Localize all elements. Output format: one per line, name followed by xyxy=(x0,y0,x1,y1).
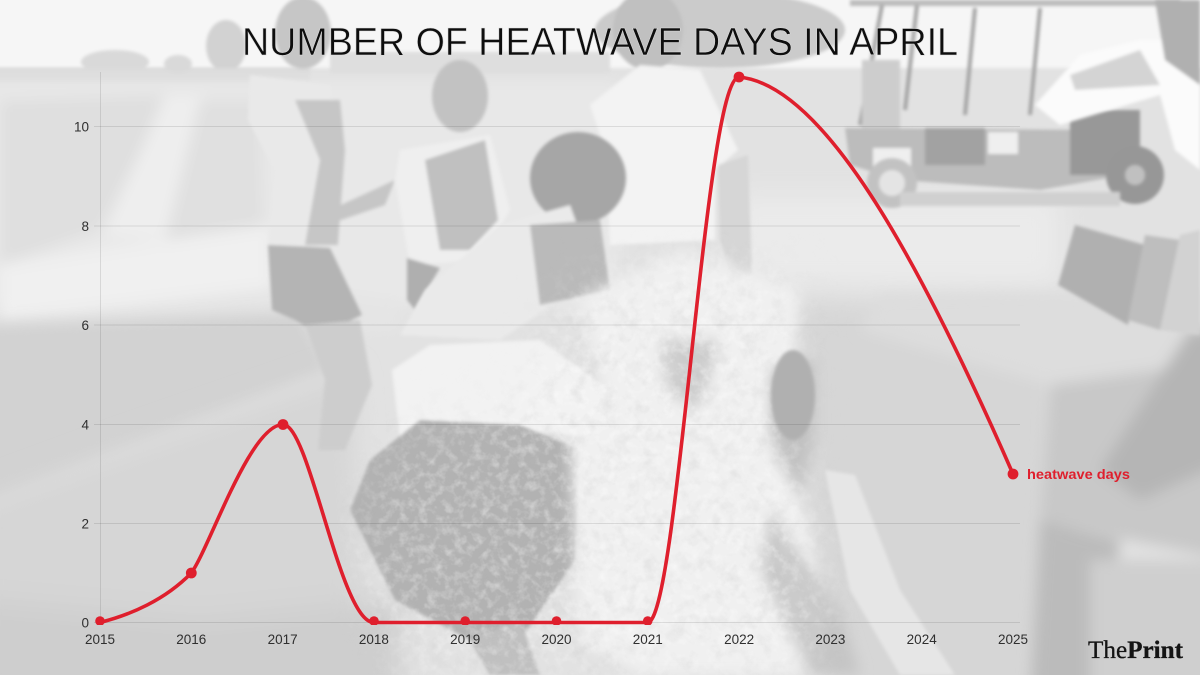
y axis labels: 4 xyxy=(81,418,89,432)
distant tree line xyxy=(0,0,845,82)
lower-left water xyxy=(0,370,400,675)
logo: ThePrint: ThePrint xyxy=(1088,637,1184,664)
x axis labels: 2016 xyxy=(176,632,206,647)
left field xyxy=(0,82,620,340)
x axis labels: 2022 xyxy=(724,632,754,647)
right rocks xyxy=(860,290,1200,675)
y axis labels: 6 xyxy=(81,318,89,333)
y axis labels: 10 xyxy=(74,120,89,134)
right water xyxy=(730,195,1060,675)
line chart: number of heatwave days xyxy=(74,72,1130,647)
x axis labels: 2025 xyxy=(998,632,1028,647)
grass bank xyxy=(0,312,330,505)
x axis labels: 2021 xyxy=(633,632,663,647)
chart grid and axes xyxy=(94,72,1020,622)
y axis labels xyxy=(74,120,89,630)
series label: heatwave days xyxy=(1027,467,1130,482)
water pipe xyxy=(1058,225,1200,335)
bent man with back and shorts xyxy=(350,132,626,675)
white car xyxy=(1035,0,1200,170)
water splash xyxy=(570,250,860,675)
y axis labels: 8 xyxy=(81,219,89,234)
x axis labels: 2017 xyxy=(268,632,298,647)
splash speckle xyxy=(360,288,830,672)
x axis labels: 2023 xyxy=(815,632,845,647)
man 3: white shirt xyxy=(590,0,752,285)
man 2 xyxy=(395,60,510,310)
man 1 xyxy=(248,0,395,450)
x axis labels xyxy=(85,632,1028,647)
x axis labels: 2024 xyxy=(907,632,937,647)
heatwave days line xyxy=(100,77,1013,622)
sky xyxy=(0,0,1200,68)
x axis labels: 2020 xyxy=(541,632,572,647)
wading person arm xyxy=(771,350,955,675)
x axis labels: 2015 xyxy=(85,632,115,647)
x axis labels: 2018 xyxy=(359,632,389,647)
y axis labels: 0 xyxy=(81,616,89,630)
x axis labels: 2019 xyxy=(450,632,480,647)
rickshaw xyxy=(845,0,1180,208)
data point markers xyxy=(95,72,1018,626)
title: NUMBER OF HEATWAVE DAYS IN APRIL xyxy=(242,21,958,64)
y axis labels: 2 xyxy=(81,516,89,532)
